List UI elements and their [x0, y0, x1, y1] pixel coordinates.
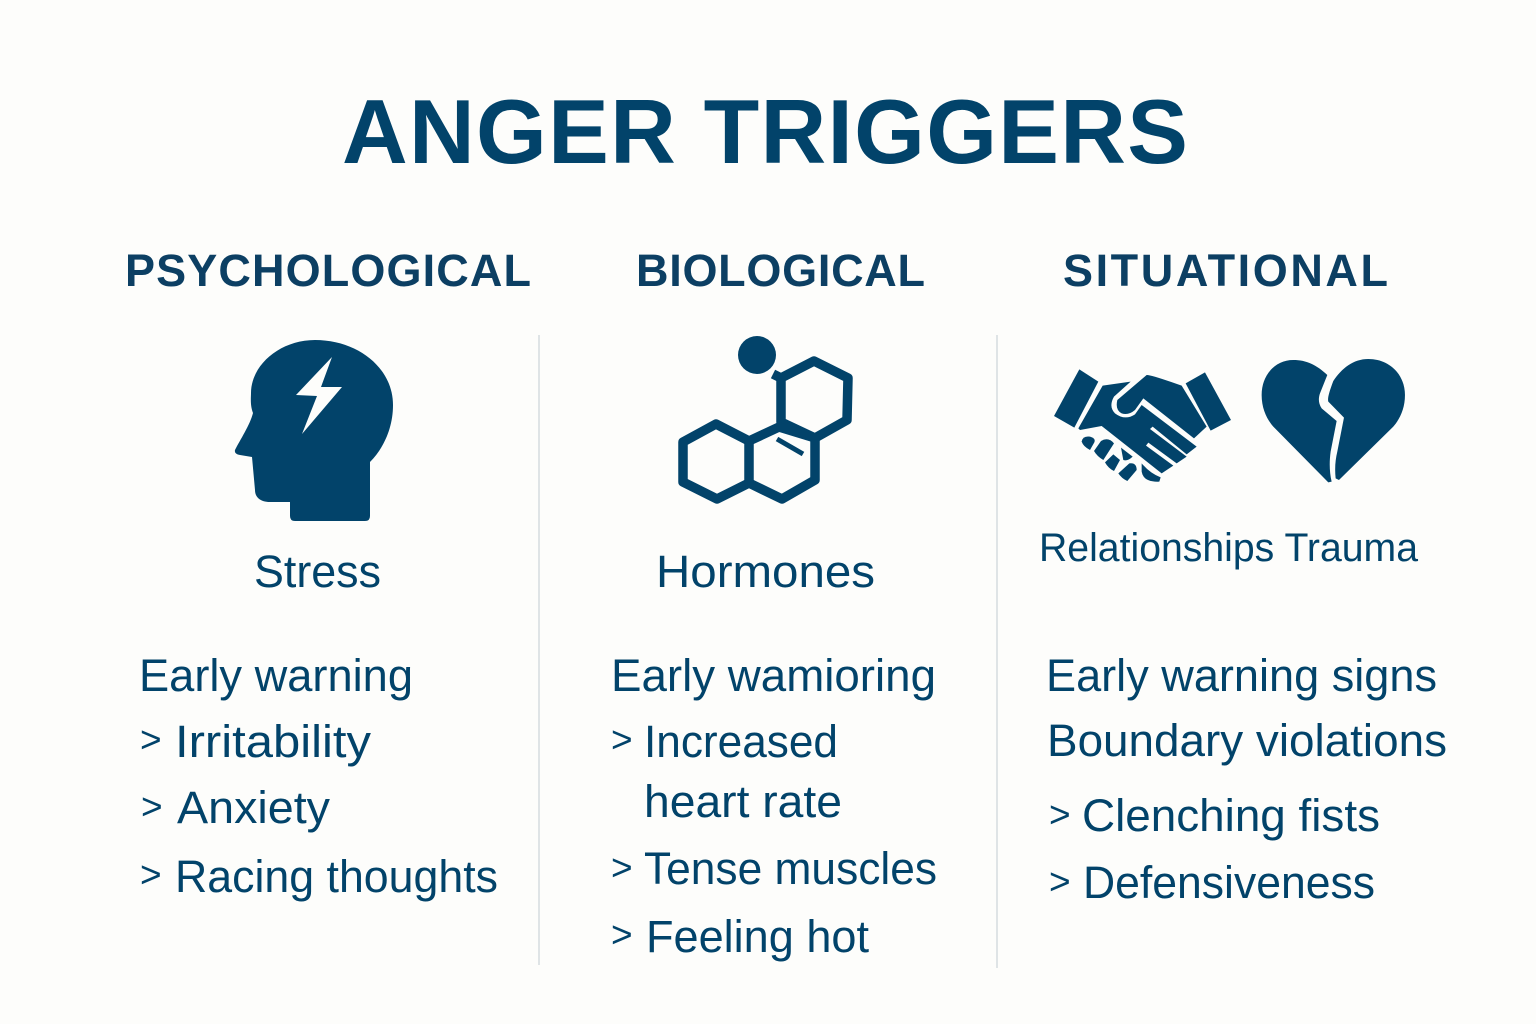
icon: handshake: [1054, 369, 1231, 482]
list: biological early warnings: >: [611, 719, 633, 760]
heading: psychological: PSYCHOLOGICAL: [125, 245, 531, 296]
list: biological early warnings: >: [611, 914, 633, 955]
icon: broken heart: [1262, 359, 1405, 482]
list: situational early warnings: [1046, 650, 1447, 908]
icon: head with lightning bolt: [235, 340, 393, 521]
list: psychological early warnings: Racing thoughts: [175, 851, 498, 902]
list: situational early warnings: Clenching fists: [1082, 790, 1380, 841]
list: psychological early warnings: Early warning: [139, 650, 413, 701]
list: biological early warnings: Tense muscles: [644, 843, 937, 894]
list: situational early warnings: Boundary violations: [1047, 715, 1447, 766]
list: biological early warnings: Increased: [644, 716, 838, 767]
list: biological early warnings: Feeling hot: [646, 911, 869, 962]
list: psychological early warnings: [139, 650, 498, 902]
heading: biological: BIOLOGICAL: [636, 245, 925, 296]
heading: situational: SITUATIONAL: [1063, 245, 1388, 296]
list: situational early warnings: >: [1049, 861, 1071, 902]
panel: psychological: [125, 245, 531, 902]
list: psychological early warnings: >: [140, 854, 162, 895]
list: situational early warnings: >: [1049, 794, 1071, 835]
icon: hormone molecule: [683, 336, 848, 499]
list: biological early warnings: [611, 650, 937, 962]
list: biological early warnings: Early wamioring: [611, 650, 936, 701]
label: relationships trauma: Relationships Trauma: [1039, 526, 1419, 570]
label: stress: Stress: [254, 546, 381, 597]
list: situational early warnings: Defensiveness: [1083, 857, 1375, 908]
list: psychological early warnings: Anxiety: [177, 782, 331, 833]
list: biological early warnings: heart rate: [644, 776, 842, 827]
list: situational early warnings: Early warning signs: [1046, 650, 1437, 701]
list: psychological early warnings: >: [140, 719, 162, 760]
title: ANGER TRIGGERS: [342, 82, 1188, 183]
list: psychological early warnings: >: [141, 786, 163, 827]
panel: biological: [611, 245, 937, 962]
panel: situational: [1039, 245, 1447, 908]
list: biological early warnings: >: [611, 847, 633, 888]
label: hormones: Hormones: [656, 546, 875, 597]
list: psychological early warnings: Irritability: [175, 716, 372, 767]
